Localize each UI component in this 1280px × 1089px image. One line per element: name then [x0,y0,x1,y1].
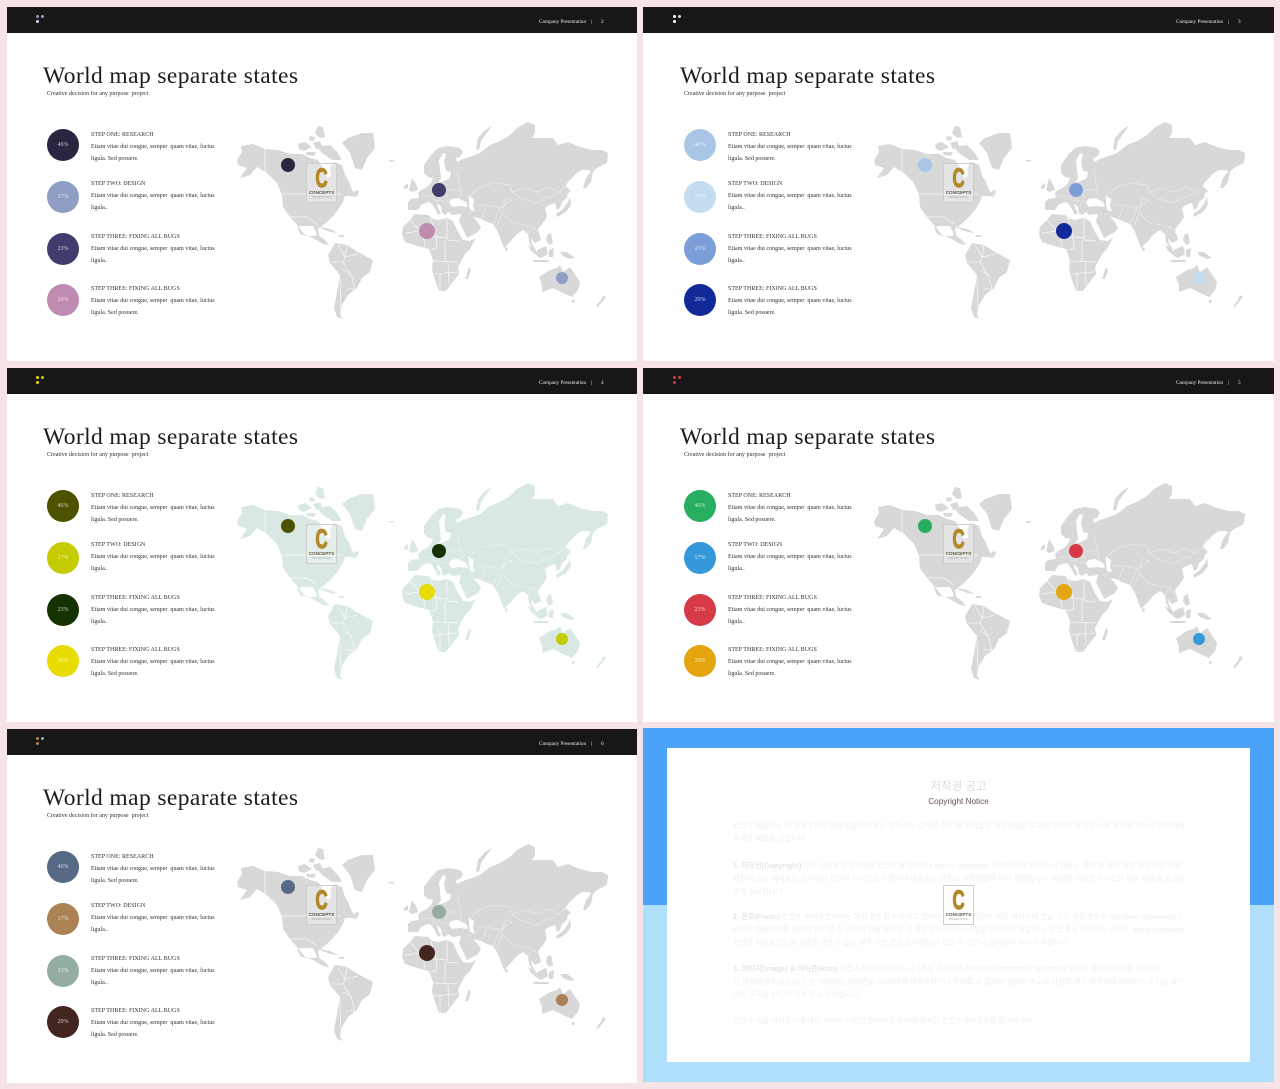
logo [306,524,337,564]
header bar: 2 [601,19,604,25]
step 1: Etiam vitae dui congue, semper quam vitae, luctus [91,144,215,150]
step 4: STEP THREE: FIXING ALL BUGS [91,646,180,652]
step 1: Etiam vitae dui congue, semper quam vitae, luctus [91,504,215,510]
title: World map separate states [43,63,298,89]
subtitle: Creative decision for any purpose project [47,812,148,818]
logo [306,885,337,925]
step 2 [684,180,852,213]
map marker: Australia [556,994,568,1006]
map marker: Africa [1056,584,1072,600]
logo [943,885,974,925]
step 1: ligula. Sed posuere. [91,156,139,162]
header bar: 4 [601,380,604,386]
header bar: | [591,19,592,25]
logo: CONCEPTS [946,190,971,194]
step 3: ligula.. [91,258,108,264]
map marker: Europe [432,183,446,197]
step 2: 17% [58,555,68,561]
step 1: 46% [58,142,68,148]
header bar [6,7,646,32]
slide 1: world map, dark palette [7,7,637,361]
step 1: STEP ONE: RESEARCH [91,132,154,138]
step 2: ligula.. [91,926,108,932]
title: World map separate states [680,424,935,450]
header bar: Company Presentation [539,380,586,386]
notice intro: 복제와 배포를 금합니다. [733,834,807,843]
header bar: Company Presentation [539,19,586,25]
step 3 [684,233,852,265]
step 4: 29% [58,658,68,664]
step 4: Etiam vitae dui congue, semper quam vitae, luctus [91,658,215,664]
header bar: 6 [601,741,604,747]
map marker: Africa [419,584,435,600]
step 3: STEP THREE: FIXING ALL BUGS [91,234,180,240]
step 1: ligula. Sed posuere. [728,156,776,162]
header bar [643,7,1280,32]
step 3: Etiam vitae dui congue, semper quam vitae, luctus [91,968,215,974]
step 1: ligula. Sed posuere. [728,516,776,522]
step 3: Etiam vitae dui congue, semper quam vitae, luctus [91,246,215,252]
logo: CONCEPTS [946,912,971,916]
step 2: Etiam vitae dui congue, semper quam vitae, luctus [91,554,215,560]
header bar: 3 [1238,19,1241,25]
step 1 [47,490,215,522]
step 4 [47,284,215,316]
header bar: Company Presentation [1176,380,1223,386]
step 1: STEP ONE: RESEARCH [91,492,154,498]
step 3: STEP THREE: FIXING ALL BUGS [728,594,817,600]
logo: CONCEPTS [309,550,334,556]
step 3: STEP THREE: FIXING ALL BUGS [728,234,817,240]
header bar [6,729,646,754]
slide 6: copyright notice [643,728,1274,1082]
step 4: STEP THREE: FIXING ALL BUGS [728,646,817,652]
step 2: STEP TWO: DESIGN [91,902,145,908]
logo: C [315,163,328,193]
header bar [6,368,646,394]
notice panel [667,748,1250,1062]
step 1: STEP ONE: RESEARCH [728,132,791,138]
step 1: Etiam vitae dui congue, semper quam vitae, luctus [91,866,215,872]
slide 5: world map, earth palette [7,729,637,1083]
step 3: 23% [58,607,68,613]
header bar: | [591,741,592,747]
title: World map separate states [43,785,298,811]
world map [237,844,608,1041]
step 3: 23% [694,607,706,613]
step 3 [47,233,215,265]
map marker: Africa [419,945,435,961]
step 2 [47,180,215,213]
subtitle: Creative decision for any purpose project [684,90,785,96]
slide 3: world map, olive palette [7,368,637,722]
logo: PRESENTATION [949,196,968,198]
world map [237,483,608,680]
title: World map separate states [680,63,935,89]
step 3: Etiam vitae dui congue, semper quam vitae, luctus [91,606,215,612]
step 2 [47,542,215,574]
step 2: STEP TWO: DESIGN [91,180,145,186]
step 2: Etiam vitae dui congue, semper quam vitae, luctus [91,192,215,198]
step 1 [684,129,852,162]
step 2: 17% [58,194,68,200]
map marker: Africa [1056,223,1072,239]
map marker: North America [281,880,295,894]
step 1: Etiam vitae dui congue, semper quam vitae, luctus [728,144,852,150]
step 2 [684,542,852,574]
step 3 [47,594,215,626]
map marker: North America [918,158,932,172]
step 4: 29% [58,297,68,303]
map marker: Africa [419,223,435,239]
step 1: 46% [694,142,706,148]
logo: PRESENTATION [312,918,331,920]
step 2 [47,902,215,935]
notice clause 2: 2. 폰트(Fonts) 컨셉츠 파워포인트에는 무료 폰트를 사용하고 있으며 폰트의 저작권은 해당 제작사에 있습니다. 무료 폰트는 Windows Download 또는 [733,912,1184,921]
notice intro [733,821,1184,843]
map marker: Australia [1193,272,1205,284]
step 4: 29% [694,658,706,664]
map marker: Europe [432,544,446,558]
slide 4: world map, multicolour palette [643,368,1274,722]
step 3: Etiam vitae dui congue, semper quam vitae, luctus [728,606,852,612]
notice clause 1 [733,861,1184,896]
title: World map separate states [43,424,298,450]
step 3: Etiam vitae dui congue, semper quam vitae, luctus [728,246,852,252]
notice clause 3: 이용 규칙을 반드시 지켜 주시기 바랍니다. [733,990,861,999]
header bar: | [1228,19,1229,25]
step 3: ligula.. [728,618,745,624]
map marker: North America [281,519,295,533]
notice clause 3: 3. 이미지(Image) & 아이콘(Icon) 컨셉츠 내의 이미지는 사이트별 라이선스 Pixabay Unsplash와 Wikipedia 등에서 제공한 자료로 저작권은 [733,964,1162,973]
step 2: 17% [58,916,68,922]
header bar [643,368,1280,394]
step 1: 46% [694,503,706,509]
step 1 [47,851,215,884]
step 1 [47,129,215,162]
logo [306,163,337,203]
step 4: 29% [694,297,706,303]
notice clause 2 [733,912,1184,947]
logo [943,163,974,203]
logo [943,524,974,564]
step 1: 46% [58,864,68,870]
world map [237,122,608,319]
step 2: STEP TWO: DESIGN [91,542,145,548]
step 1: ligula. Sed posuere. [91,878,139,884]
logo: C [952,163,965,193]
step 3: ligula.. [91,980,108,986]
step 1: STEP ONE: RESEARCH [728,492,791,498]
logo: PRESENTATION [312,556,331,560]
subtitle: Creative decision for any purpose project [47,452,148,458]
world map [874,483,1245,680]
step 4: STEP THREE: FIXING ALL BUGS [728,286,817,292]
step 1: 46% [58,503,68,509]
step 1 [684,490,852,522]
logo: C [952,885,965,915]
header bar: | [1228,380,1229,386]
header bar: 5 [1238,380,1241,386]
step 4: Etiam vitae dui congue, semper quam vitae, luctus [728,298,852,304]
step 4: 29% [58,1019,68,1025]
subtitle: Creative decision for any purpose project [684,452,785,458]
step 4: ligula. Sed posuere. [91,670,139,676]
step 4: Etiam vitae dui congue, semper quam vitae, luctus [91,298,215,304]
step 4 [684,645,852,677]
step 4: Etiam vitae dui congue, semper quam vitae, luctus [728,658,852,664]
step 4 [47,1006,215,1038]
header bar: Company Presentation [1176,19,1223,25]
step 2: STEP TWO: DESIGN [728,542,782,548]
notice subtitle: Copyright Notice [928,796,989,806]
map marker: North America [281,158,295,172]
step 1: Etiam vitae dui congue, semper quam vitae, luctus [728,504,852,510]
step 2: ligula.. [91,566,108,572]
step 2: 17% [694,194,706,200]
step 3: ligula.. [728,258,745,264]
notice clause 3 [733,964,1184,999]
step 4 [47,645,215,677]
logo: CONCEPTS [309,912,334,916]
world map [874,122,1245,319]
map marker: North America [918,519,932,533]
logo: CONCEPTS [946,550,971,556]
step 3: 23% [58,246,68,252]
step 4: ligula. Sed posuere. [728,310,776,316]
notice title: 저작권 공고 [930,780,987,792]
step 4: ligula. Sed posuere. [91,1032,139,1038]
step 3 [47,955,215,987]
step 3: ligula.. [91,618,108,624]
map marker: Australia [1193,633,1205,645]
step 2: 17% [694,555,706,561]
map marker: Australia [556,272,568,284]
step 4: STEP THREE: FIXING ALL BUGS [91,1008,180,1014]
logo: PRESENTATION [949,918,968,920]
logo: PRESENTATION [949,556,968,560]
step 2: Etiam vitae dui congue, semper quam vitae, luctus [728,192,852,198]
logo: PRESENTATION [312,196,331,198]
step 3: STEP THREE: FIXING ALL BUGS [91,956,180,962]
step 2: ligula.. [728,566,745,572]
slide 2: world map, blue palette [643,7,1274,361]
header bar: Company Presentation [539,741,586,747]
step 2: Etiam vitae dui congue, semper quam vitae, luctus [91,914,215,920]
map marker: Europe [1069,544,1083,558]
step 4: ligula. Sed posuere. [91,310,139,316]
step 3 [684,594,852,626]
logo: CONCEPTS [309,190,334,194]
logo: C [315,885,328,915]
step 3: 23% [694,246,706,252]
map marker: Europe [432,905,446,919]
step 2: STEP TWO: DESIGN [728,180,782,186]
logo: C [952,524,965,554]
step 1: STEP ONE: RESEARCH [91,854,154,860]
step 4: STEP THREE: FIXING ALL BUGS [91,286,180,292]
step 4: Etiam vitae dui congue, semper quam vitae, luctus [91,1020,215,1026]
notice clause 2: 컨셉츠 파워포인트에 사용된 폰트가 없는 경우 다른 폰트로 대체되어 보일 수 있으니 설치하여 주시기 바랍니다. [733,938,1070,947]
step 4: ligula. Sed posuere. [728,670,776,676]
step 3: 23% [58,968,68,974]
step 2: ligula.. [728,204,745,210]
step 1: ligula. Sed posuere. [91,516,139,522]
logo: C [315,524,328,554]
notice closing: 컨셉츠 제품 라이선스에 대한 자세한 사항은 홈페이지 하단에 위치한 컨셉츠라이선스를 참고하세요. [733,1016,1034,1025]
step 3: STEP THREE: FIXING ALL BUGS [91,594,180,600]
step 4 [684,284,852,316]
notice clause 1: 항상 감사합니다. [733,887,785,896]
header bar: | [591,380,592,386]
step 2: ligula.. [91,204,108,210]
subtitle: Creative decision for any purpose project [47,90,148,96]
step 2: Etiam vitae dui congue, semper quam vitae, luctus [728,554,852,560]
map marker: Europe [1069,183,1083,197]
map marker: Australia [556,633,568,645]
